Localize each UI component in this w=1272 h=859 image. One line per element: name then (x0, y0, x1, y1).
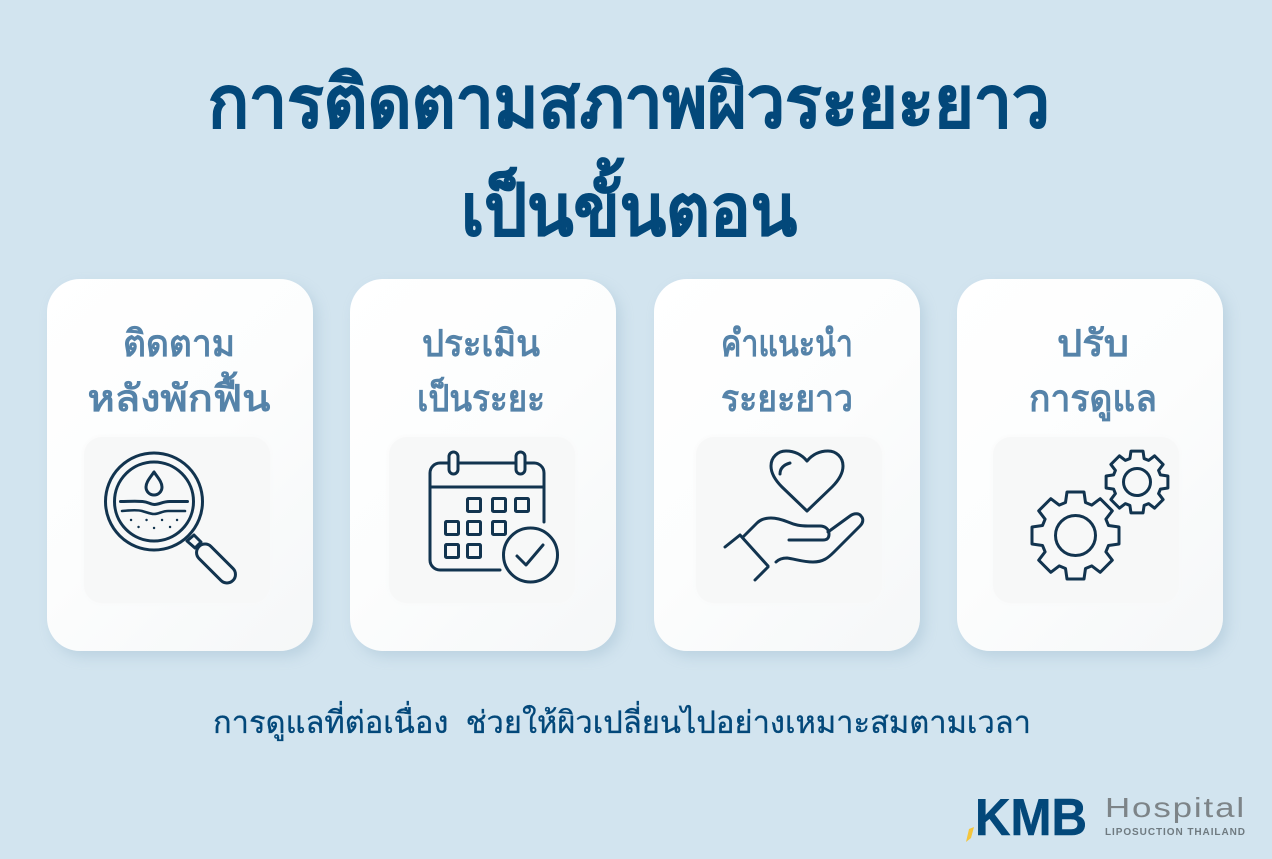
icon: hand holding heart (725, 451, 863, 580)
heading: card 1: หลังพักฟื้น (88, 371, 270, 419)
logo: KMB Hospital: Hospital (1105, 792, 1246, 823)
logo: KMB Hospital: KMB (975, 789, 1087, 847)
icon: calendar with check (430, 452, 558, 582)
logo: KMB Hospital: LIPOSUCTION THAILAND (1105, 827, 1245, 838)
panel: card 1 (47, 279, 313, 651)
icon: gears (1032, 451, 1168, 579)
heading: card 1: ติดตาม (123, 323, 235, 364)
heading: card 2: เป็นระยะ (417, 375, 545, 419)
heading: card 2: ประเมิน (422, 323, 540, 364)
panel: card 4 (957, 279, 1223, 651)
title (208, 63, 1050, 251)
panel: card 2 (350, 279, 616, 651)
heading: card 3 (721, 323, 853, 419)
heading: card 4 (1029, 323, 1157, 422)
heading: card 1 (88, 323, 270, 419)
panel: card 3 (654, 279, 920, 651)
heading: card 3: คำแนะนำ (721, 323, 853, 364)
title: เป็นขั้นตอน (461, 157, 797, 251)
caption: การดูแลที่ต่อเนื่อง ช่วยให้ผิวเปลี่ยนไปอย่างเหมาะสมตามเวลา (213, 701, 1031, 741)
title: การติดตามสภาพผิวระยะยาว (208, 63, 1050, 143)
heading: card 4: ปรับ (1057, 323, 1129, 364)
logo mark: yellow accent (966, 827, 974, 842)
heading: card 3: ระยะยาว (721, 378, 853, 419)
heading: card 4: การดูแล (1029, 378, 1157, 422)
logo: KMB Hospital (966, 789, 1246, 847)
heading: card 2 (417, 323, 545, 419)
icon: magnifier with skin layers (106, 453, 239, 586)
